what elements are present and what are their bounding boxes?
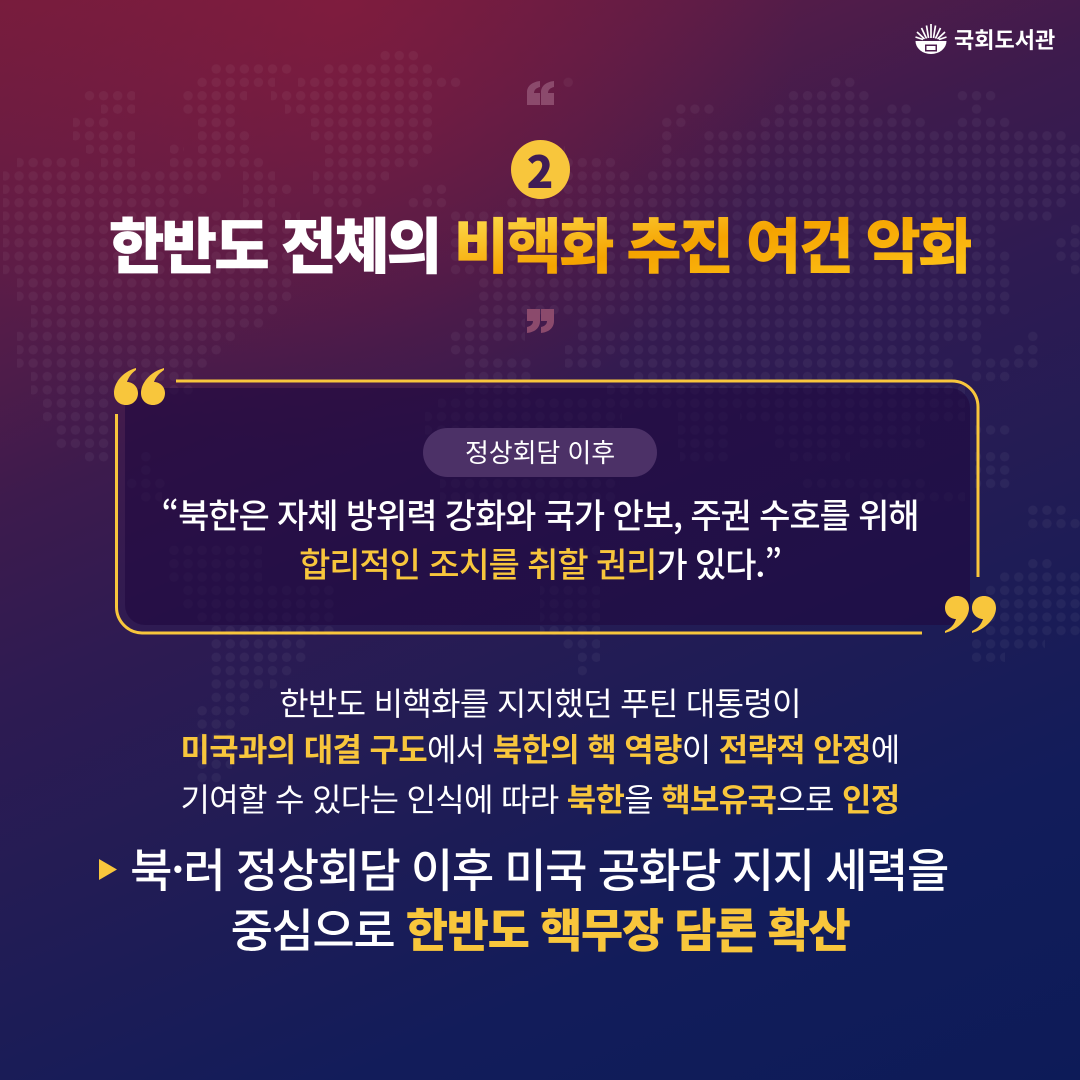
section number badge <box>510 140 570 199</box>
panel: quote box <box>114 368 996 634</box>
section number badge: 2 <box>527 137 553 201</box>
logo text: 국회도서관 <box>954 23 1055 55</box>
body line 2: 미국과의 대결 구도에서 북한의 핵 역량이 전략적 안정에 <box>181 725 899 771</box>
panel background <box>125 388 970 625</box>
quote text <box>162 489 918 587</box>
body paragraph <box>181 679 899 821</box>
icon: large closing quote <box>945 596 996 633</box>
icon: arrow marker <box>99 859 117 880</box>
conclusion line 2: 중심으로 한반도 핵무장 담론 확산 <box>231 895 849 961</box>
pill label: 정상회담 이후 <box>465 433 615 470</box>
pill label <box>423 428 657 477</box>
icon: book with sun rays <box>915 24 947 54</box>
panel yellow frame <box>115 380 980 634</box>
conclusion <box>99 835 948 961</box>
conclusion line 1: 북·러 정상회담 이후 미국 공화당 지지 세력을 <box>130 835 948 901</box>
icon: large opening quote <box>114 368 165 405</box>
quote line 1: “북한은 자체 방위력 강화와 국가 안보, 주권 수호를 위해 <box>162 489 918 538</box>
quote line 2: 합리적인 조치를 취할 권리가 있다.” <box>299 538 781 587</box>
title: 한반도 전체의 비핵화 추진 여건 악화 <box>109 199 971 286</box>
body line 3: 기여할 수 있다는 인식에 따라 북한을 핵보유국으로 인정 <box>181 775 899 821</box>
logo: National Assembly Library <box>915 23 1055 55</box>
body line 1: 한반도 비핵화를 지지했던 푸틴 대통령이 <box>279 679 801 725</box>
